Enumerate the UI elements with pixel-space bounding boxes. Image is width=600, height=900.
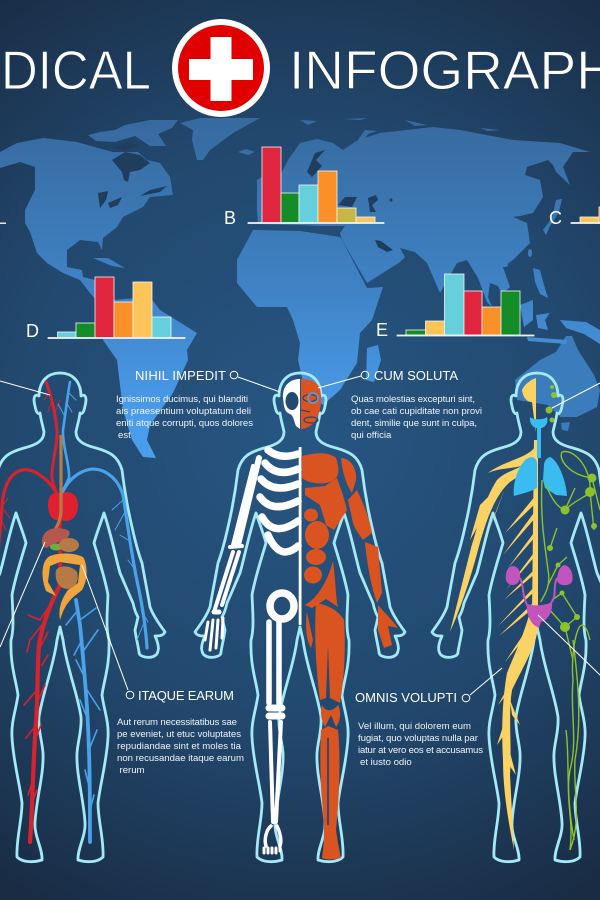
text block: CUM SOLUTA: Quas molestias excepturi sint, <box>351 394 475 405</box>
lymphatic system <box>541 452 600 850</box>
text block: OMNIS VOLUPTI: fugiat, quo voluptas nulla par <box>358 733 479 744</box>
bar chart E <box>376 274 534 340</box>
bar chart D <box>26 277 185 341</box>
bar chart C: C <box>549 208 562 228</box>
esophagus <box>55 435 61 530</box>
bar chart E: E <box>376 320 388 340</box>
liver <box>42 528 70 548</box>
text block: CUM SOLUTA: dent, similie que sunt in culpa, <box>351 418 477 429</box>
callout lines left <box>0 381 134 699</box>
skeleton <box>205 379 302 853</box>
text block: ITAQUE EARUM: non recusandae itaque earum <box>117 753 244 764</box>
muscle gaps <box>327 738 329 825</box>
text block: CUM SOLUTA <box>351 368 482 441</box>
stomach <box>59 538 79 552</box>
icon: red cross emblem <box>172 19 270 117</box>
body outline <box>432 373 600 862</box>
text block: CUM SOLUTA: CUM SOLUTA <box>374 368 458 383</box>
text block: NIHIL IMPEDIT: ais praesentium voluptatum deli <box>116 406 251 417</box>
text block: OMNIS VOLUPTI <box>355 690 483 768</box>
lymph nodes <box>546 385 597 632</box>
title: DICAL <box>1 39 151 101</box>
text block: NIHIL IMPEDIT: est <box>118 430 131 441</box>
muscle system <box>301 379 398 860</box>
gallbladder <box>50 544 62 550</box>
text block: ITAQUE EARUM: Aut rerum necessitatibus sae <box>117 717 237 728</box>
title <box>1 39 600 101</box>
facial muscle details <box>301 393 318 423</box>
body outline <box>0 373 165 862</box>
text block: NIHIL IMPEDIT: eniti atque corrupti, quos dolores <box>116 418 253 429</box>
text block: ITAQUE EARUM: repudiandae sint et moles tia <box>117 741 242 752</box>
text block: OMNIS VOLUPTI: OMNIS VOLUPTI <box>355 690 457 705</box>
text block: ITAQUE EARUM: pe eveniet, ut etuc voluptates <box>117 729 241 740</box>
bar chart B: B <box>224 208 236 228</box>
large intestine <box>43 553 87 620</box>
text block: CUM SOLUTA: ob cae cati cupiditate non provi <box>351 406 482 417</box>
text block: ITAQUE EARUM: rerum <box>120 765 145 776</box>
text block: ITAQUE EARUM: ITAQUE EARUM <box>138 688 234 703</box>
map inland waters <box>98 142 393 252</box>
bar chart C <box>549 207 600 228</box>
text block: OMNIS VOLUPTI: iatur at vero eos et accusamus <box>358 745 483 756</box>
text block: OMNIS VOLUPTI: Vel illum, qui dolorem eum <box>358 721 471 732</box>
nervous system <box>450 378 538 850</box>
figure: nervous, respiratory and lymphatic body <box>432 373 600 862</box>
callout lines right <box>462 383 600 702</box>
figure: circulatory and digestive body <box>0 373 165 862</box>
veins <box>58 382 148 842</box>
text block: NIHIL IMPEDIT: NIHIL IMPEDIT <box>135 368 226 383</box>
bar chart B <box>224 147 384 228</box>
text block: CUM SOLUTA: qui officia <box>351 430 392 441</box>
text block: NIHIL IMPEDIT <box>116 368 253 441</box>
bar chart D: D <box>26 321 39 341</box>
eye socket <box>286 392 298 410</box>
text block: ITAQUE EARUM <box>117 688 244 776</box>
heart <box>48 492 78 521</box>
world map <box>0 118 600 458</box>
bar chart A fragment <box>0 222 6 224</box>
body outline <box>195 373 405 862</box>
text block: OMNIS VOLUPTI: et iusto odio <box>360 757 412 768</box>
small intestine <box>56 566 78 589</box>
arteries <box>0 382 60 842</box>
figure: skeleton and muscle body <box>195 371 405 862</box>
lungs <box>514 417 567 496</box>
callout lines centre <box>230 371 369 392</box>
urinary system <box>506 565 573 628</box>
text block: NIHIL IMPEDIT: Ignissimos ducimus, qui blanditi <box>116 394 248 405</box>
